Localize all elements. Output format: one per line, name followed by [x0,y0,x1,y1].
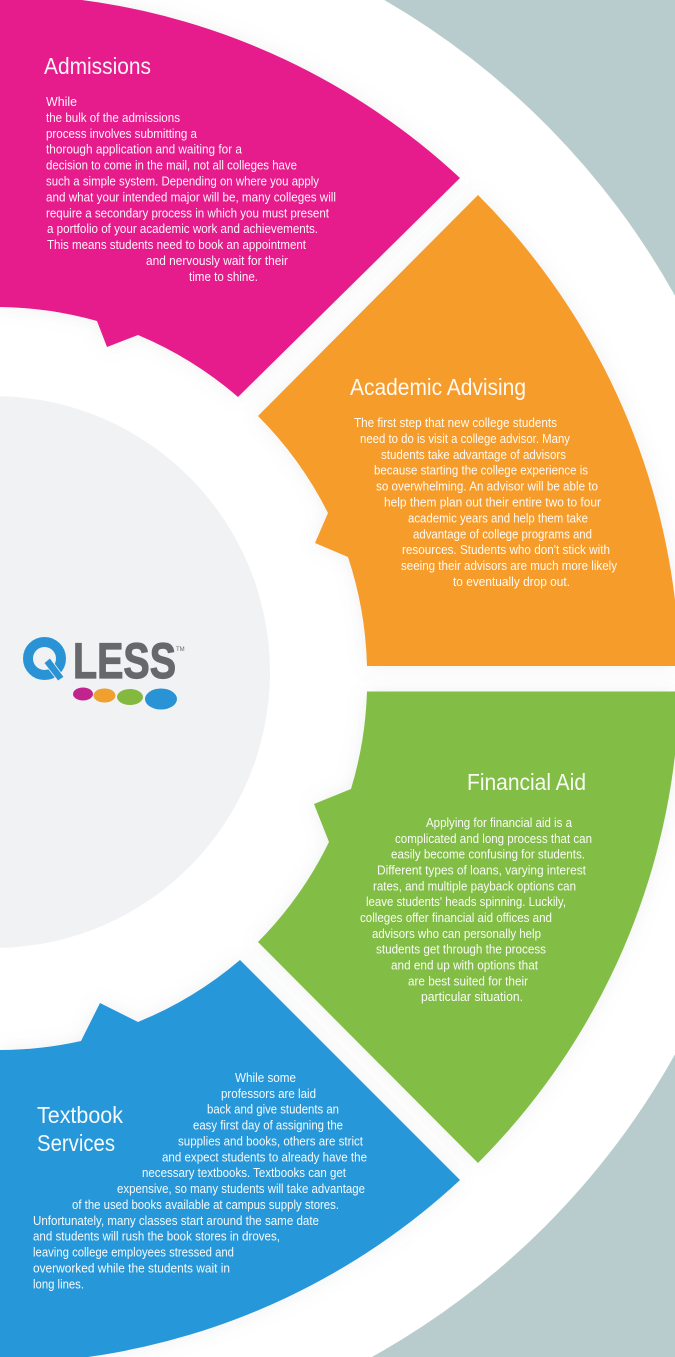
text block: textbook services: While some [235,1071,296,1085]
text block: textbook services: necessary textbooks. Textbooks can get [142,1166,346,1180]
text block: textbook services: back and give students an [207,1103,339,1117]
text block: academic advising: resources. Students who don't stick with [402,543,610,557]
text block: textbook services: and expect students to already have the [162,1150,367,1164]
text block: textbook services: expensive, so many students will take advantage [117,1182,365,1196]
text block: academic advising: so overwhelming. An advisor will be able to [376,480,598,494]
text block: financial aid: complicated and long process that can [395,832,592,846]
text block: academic advising: advantage of college programs and [413,527,592,541]
heading: academic advising: Academic Advising [350,374,526,400]
text block: textbook services: and students will rush the book stores in droves, [33,1230,280,1244]
text block: academic advising: to eventually drop out. [453,575,570,589]
text block: financial aid: rates, and multiple payback options can [373,879,576,893]
icon: coloured dots [73,688,177,710]
text block: admissions: and nervously wait for their [146,254,288,268]
heading: textbook services: Textbook [37,1102,123,1128]
heading: textbook services [37,1102,123,1156]
text block: admissions: thorough application and waiting for a [46,143,242,157]
text block: admissions: the bulk of the admissions [46,111,180,125]
text block: admissions: such a simple system. Depending on where you apply [46,174,320,188]
text block: academic advising: seeing their advisors are much more likely [401,559,618,573]
text block: academic advising [354,416,618,589]
text block: admissions: decision to come in the mail, not all colleges have [46,159,297,173]
text block: textbook services: leaving college employees stressed and [33,1246,234,1260]
text block: financial aid: easily become confusing for students. [391,848,585,862]
icon: Q ring [28,642,64,681]
panel: financial aid [258,692,675,1163]
text block: admissions [46,95,336,284]
wordmark: LESS: LESS [73,633,176,689]
text block: textbook services: long lines. [33,1277,84,1291]
heading: admissions: Admissions [44,53,151,79]
text block: admissions: process involves submitting a [46,127,197,141]
text block: financial aid: Different types of loans, varying interest [377,864,586,878]
text block: financial aid: leave students' heads spinning. Luckily, [366,895,566,909]
text block: financial aid: particular situation. [421,990,523,1004]
text block: admissions: and what your intended major will be, many colleges will [46,190,336,204]
text block: admissions: require a secondary process in which you must present [46,206,329,220]
center grey circle [0,396,270,948]
panel: admissions [0,0,460,397]
text block: textbook services: Unfortunately, many classes start around the same date [33,1214,319,1228]
text block: textbook services: overworked while the students wait in [33,1261,230,1275]
text block: textbook services: supplies and books, others are strict [178,1134,363,1148]
text block: financial aid: students get through the process [376,943,546,957]
text block: textbook services: of the used books available at campus supply stores. [72,1198,339,1212]
trademark: TM [176,647,185,653]
text block: admissions: This means students need to book an appointment [47,238,306,252]
panel: textbook services [0,960,460,1357]
text block: textbook services: easy first day of assigning the [193,1119,343,1133]
text block: academic advising: need to do is visit a college advisor. Many [360,432,571,446]
text block: financial aid: advisors who can personally help [372,927,541,941]
text block: financial aid: Applying for financial aid is a [426,816,572,830]
text block: admissions: a portfolio of your academic work and achievements. [47,222,318,236]
text block: financial aid: and end up with options that [391,958,538,972]
text block: academic advising: help them plan out their entire two to four [384,496,601,510]
text block: admissions: While [46,95,77,109]
text block: textbook services: professors are laid [221,1087,316,1101]
heading: textbook services: Services [37,1130,115,1156]
text block: financial aid: are best suited for their [408,974,528,988]
panel: academic advising [258,195,675,666]
text block: academic advising: because starting the college experience is [374,464,588,478]
logo: QLESS [28,633,185,710]
text block: academic advising: students take advantage of advisors [381,448,566,462]
text block: textbook services [33,1071,367,1291]
heading: financial aid: Financial Aid [467,769,586,795]
text block: financial aid: colleges offer financial aid offices and [360,911,552,925]
text block: admissions: time to shine. [189,270,258,284]
text block: financial aid [360,816,592,1004]
text block: academic advising: The first step that new college students [354,416,557,430]
text block: academic advising: academic years and help them take [408,511,588,525]
